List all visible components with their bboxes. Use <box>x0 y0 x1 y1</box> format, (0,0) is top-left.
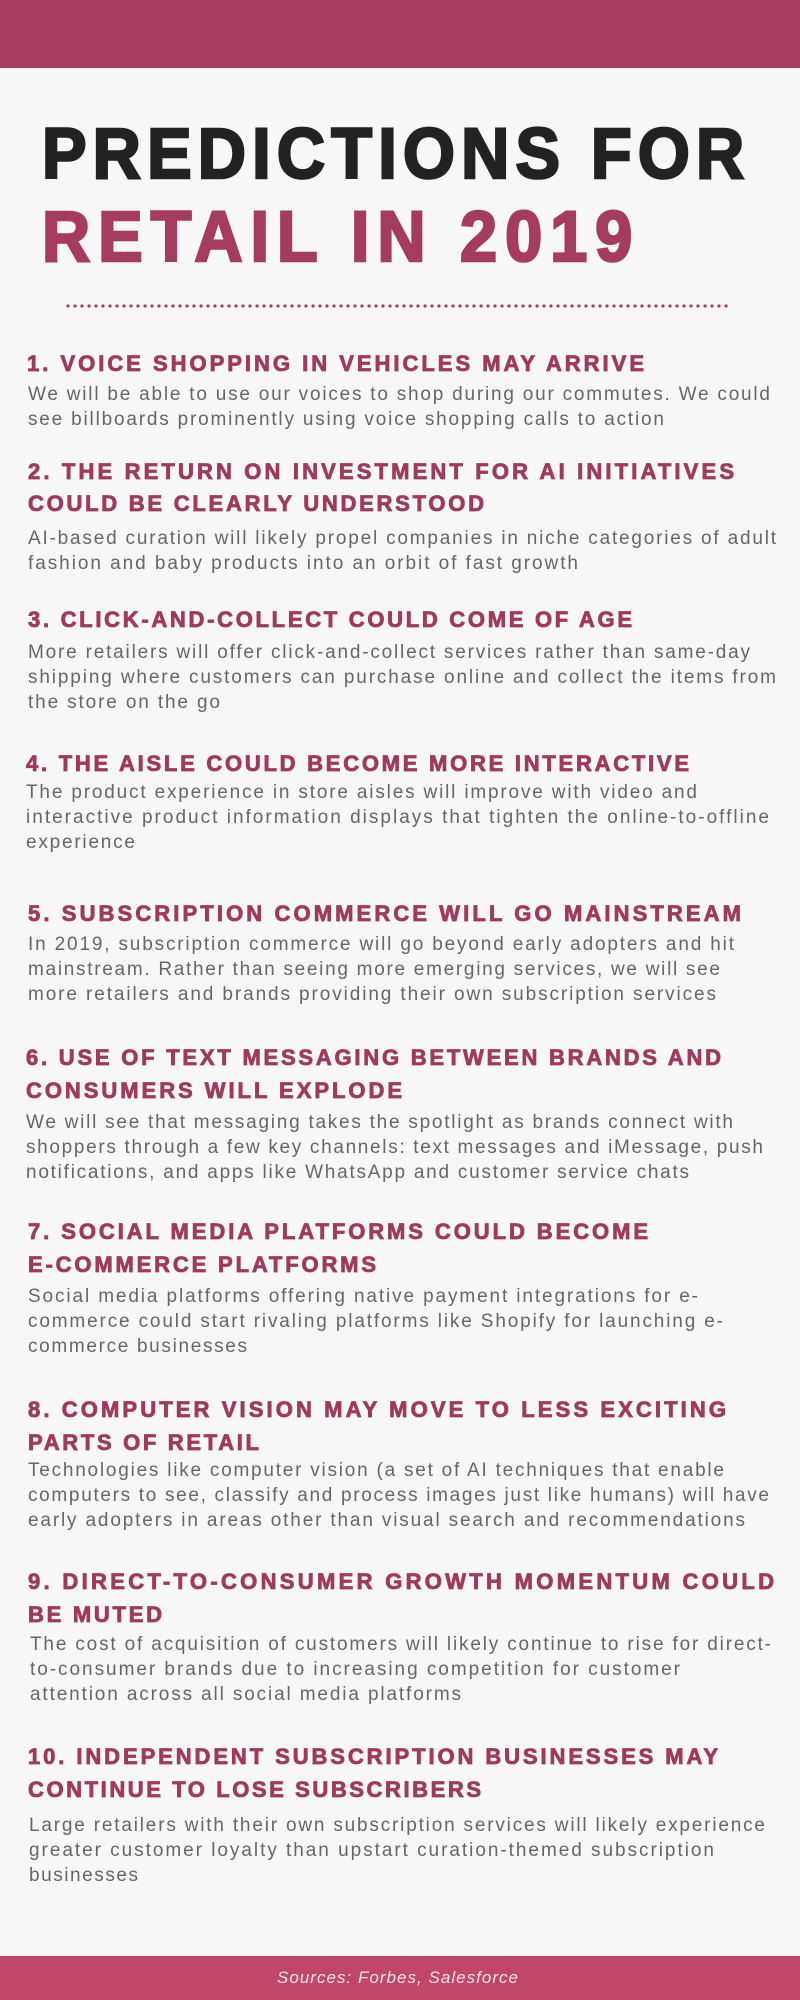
body 10: businesses <box>29 1865 138 1886</box>
body 8: Technologies like computer vision (a set of AI techniques that enable <box>28 1460 724 1481</box>
body 6: We will see that messaging takes the spotlight as brands connect with <box>26 1112 733 1133</box>
dotted divider <box>68 304 729 308</box>
body 6: notifications, and apps like WhatsApp and customer service chats <box>26 1162 689 1183</box>
body 4: interactive product information displays that tighten the online-to-offline <box>26 807 769 828</box>
heading 8: 8. COMPUTER VISION MAY MOVE TO LESS EXCITING <box>28 1397 726 1422</box>
body 9: attention across all social media platforms <box>30 1684 461 1705</box>
prediction 2 <box>28 459 777 574</box>
footer bar <box>0 1956 800 2000</box>
heading 1: 1. VOICE SHOPPING IN VEHICLES MAY ARRIVE <box>27 351 644 376</box>
body 3: More retailers will offer click-and-collect services rather than same-day <box>28 642 750 663</box>
heading 10: CONTINUE TO LOSE SUBSCRIBERS <box>28 1777 481 1802</box>
heading 7 <box>28 1219 648 1277</box>
heading 5: 5. SUBSCRIPTION COMMERCE WILL GO MAINSTREAM <box>28 901 741 926</box>
heading 10 <box>28 1744 718 1802</box>
heading 9: 9. DIRECT-TO-CONSUMER GROWTH MOMENTUM COULD <box>28 1569 774 1594</box>
heading 6: CONSUMERS WILL EXPLODE <box>26 1078 402 1103</box>
body 7 <box>28 1286 723 1357</box>
body 6 <box>26 1112 763 1183</box>
body 8: early adopters in areas other than visual search and recommendations <box>28 1510 745 1531</box>
body 1 <box>28 384 770 430</box>
body 3: the store on the go <box>28 692 220 713</box>
body 3 <box>28 642 776 713</box>
prediction 4 <box>26 751 769 853</box>
body 4 <box>26 782 769 853</box>
title <box>42 114 744 276</box>
prediction 8 <box>28 1397 769 1531</box>
body 7: commerce businesses <box>28 1336 247 1357</box>
prediction 6 <box>26 1045 763 1183</box>
prediction 1 <box>27 351 770 430</box>
body 1: We will be able to use our voices to shop during our commutes. We could <box>28 384 770 405</box>
heading 3: 3. CLICK-AND-COLLECT COULD COME OF AGE <box>28 607 632 632</box>
prediction 10 <box>28 1744 765 1886</box>
body 7: Social media platforms offering native payment integrations for e- <box>28 1286 698 1307</box>
heading 10: 10. INDEPENDENT SUBSCRIPTION BUSINESSES MAY <box>28 1744 718 1769</box>
body 2: fashion and baby products into an orbit of fast growth <box>28 553 578 574</box>
body 4: The product experience in store aisles will improve with video and <box>26 782 697 803</box>
body 5: more retailers and brands providing their own subscription services <box>28 984 716 1005</box>
top banner <box>0 0 800 68</box>
heading 8: PARTS OF RETAIL <box>28 1430 259 1455</box>
heading 2: COULD BE CLEARLY UNDERSTOOD <box>28 491 484 516</box>
prediction 9 <box>28 1569 774 1705</box>
prediction 7 <box>28 1219 723 1357</box>
sources text: Sources: Forbes, Salesforce <box>277 1968 518 1987</box>
body 1: see billboards prominently using voice shopping calls to action <box>28 409 664 430</box>
body 8: computers to see, classify and process images just like humans) will have <box>28 1485 769 1506</box>
prediction 3 <box>28 607 776 713</box>
heading 6: 6. USE OF TEXT MESSAGING BETWEEN BRANDS AND <box>26 1045 721 1070</box>
heading 7: E-COMMERCE PLATFORMS <box>28 1252 376 1277</box>
body 9: to-consumer brands due to increasing competition for customer <box>30 1659 681 1680</box>
heading 9: BE MUTED <box>28 1602 162 1627</box>
body 3: shipping where customers can purchase online and collect the items from <box>28 667 776 688</box>
body 6: shoppers through a few key channels: text messages and iMessage, push <box>26 1137 763 1158</box>
body 8 <box>28 1460 769 1531</box>
body 2 <box>28 528 777 574</box>
heading 6 <box>26 1045 721 1103</box>
title: PREDICTIONS FOR <box>42 114 744 193</box>
heading 7: 7. SOCIAL MEDIA PLATFORMS COULD BECOME <box>28 1219 648 1244</box>
body 7: commerce could start rivaling platforms like Shopify for launching e- <box>28 1311 723 1332</box>
body 4: experience <box>26 832 135 853</box>
body 5: In 2019, subscription commerce will go beyond early adopters and hit <box>28 934 735 955</box>
heading 2 <box>28 459 734 516</box>
title: RETAIL IN 2019 <box>42 197 632 276</box>
heading 2: 2. THE RETURN ON INVESTMENT FOR AI INITIATIVES <box>28 459 734 484</box>
heading 8 <box>28 1397 726 1455</box>
heading 4: 4. THE AISLE COULD BECOME MORE INTERACTIVE <box>26 751 689 776</box>
body 9 <box>30 1634 771 1705</box>
heading 9 <box>28 1569 774 1627</box>
body 5: mainstream. Rather than seeing more emerging services, we will see <box>28 959 720 980</box>
body 9: The cost of acquisition of customers will likely continue to rise for direct- <box>30 1634 771 1655</box>
body 10: Large retailers with their own subscription services will likely experience <box>29 1815 765 1836</box>
body 2: AI-based curation will likely propel companies in niche categories of adult <box>28 528 777 549</box>
body 5 <box>28 934 735 1005</box>
body 10 <box>29 1815 765 1886</box>
prediction 5 <box>28 901 741 1005</box>
body 10: greater customer loyalty than upstart curation-themed subscription <box>29 1840 714 1861</box>
